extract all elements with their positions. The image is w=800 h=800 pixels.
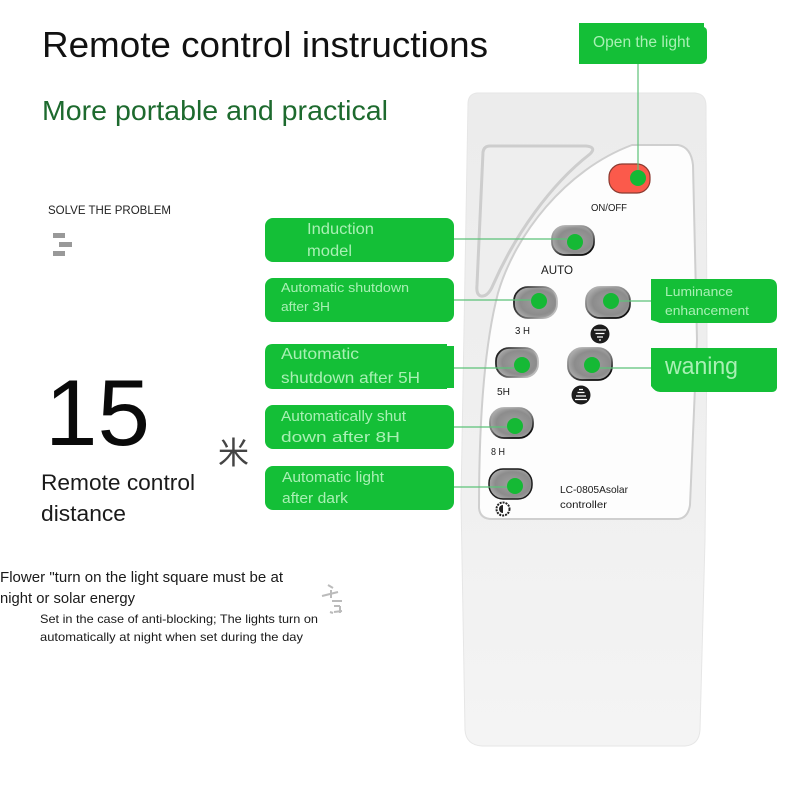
callout: induction model: Induction: [307, 221, 374, 238]
icon: luminance up: [590, 324, 610, 344]
callout: shutdown after 3h: after 3H: [281, 299, 330, 314]
distance caption: [41, 470, 195, 526]
button: waning: [568, 348, 612, 380]
label: model: controller: [560, 499, 608, 511]
title: Remote control instructions: [42, 24, 488, 65]
button: on/off: [609, 164, 650, 193]
note: flower turn on the light: Flower "turn on the light square must be at: [0, 570, 283, 586]
callout: luminance enhancement: [651, 279, 777, 323]
unit glyph: metre: 米: [218, 436, 249, 471]
button: luminance: [586, 287, 630, 318]
callout: shutdown after 5h: shutdown after 5H: [281, 370, 420, 387]
callout: shutdown after 3h: [265, 278, 454, 322]
callout: open the light: [579, 23, 707, 64]
button: 8h: [490, 408, 533, 438]
label: on/off: ON/OFF: [591, 203, 627, 214]
callout: shut down after 8h: Automatically shut: [281, 409, 406, 425]
icon: luminance down: [572, 386, 590, 404]
note: anti-blocking: automatically at night when set during the day: [40, 630, 303, 644]
note: flower turn on the light: [0, 570, 283, 607]
button: light after dark: [489, 469, 532, 499]
button: 3h: [514, 287, 557, 318]
callout: luminance enhancement: Luminance: [665, 284, 733, 299]
callout: induction model: [265, 218, 454, 262]
callout: waning: [651, 348, 777, 392]
callout: waning: waning: [664, 353, 738, 380]
distance caption: Remote control: [41, 470, 195, 495]
icon: faded glyph bars: [53, 233, 72, 256]
distance caption: distance: [41, 501, 126, 526]
callout: light after dark: Automatic light: [282, 470, 384, 486]
note: anti-blocking: [40, 612, 318, 644]
label: model: [560, 484, 628, 511]
callout: shutdown after 3h: Automatic shutdown: [281, 280, 409, 295]
callout: luminance enhancement: enhancement: [665, 303, 749, 318]
callout: light after dark: after dark: [282, 491, 349, 507]
label: 8h: 8 H: [491, 447, 505, 458]
note: flower turn on the light: night or solar energy: [0, 591, 136, 607]
recessed triangle: [477, 146, 593, 296]
icon: day night: [496, 502, 510, 516]
callout: shut down after 8h: [265, 405, 454, 449]
remote control: [461, 93, 707, 746]
label: 3h: 3 H: [515, 326, 530, 337]
callout: light after dark: [265, 466, 454, 510]
callout: induction model: model: [307, 243, 352, 260]
distance number: 15: [45, 360, 150, 465]
button: 5h: [496, 348, 538, 377]
button: auto: [552, 226, 594, 255]
callout: shutdown after 5h: Automatic: [281, 346, 359, 363]
callout: shutdown after 5h: [265, 344, 454, 389]
note: anti-blocking: Set in the case of anti-blocking; The lights turn on: [40, 612, 318, 626]
faded glyph: [322, 585, 342, 613]
leader lines: [454, 64, 651, 487]
callout: shut down after 8h: down after 8H: [281, 430, 400, 446]
label: auto: AUTO: [541, 263, 573, 277]
label: 5h: 5H: [497, 387, 510, 398]
subtitle: More portable and practical: [42, 95, 388, 126]
white control panel: [479, 145, 697, 519]
section label: solve the problem: SOLVE THE PROBLEM: [48, 203, 171, 217]
label: model: LC-0805Asolar: [560, 484, 628, 496]
remote body: [461, 93, 707, 746]
callout: open the light: Open the light: [593, 34, 691, 51]
